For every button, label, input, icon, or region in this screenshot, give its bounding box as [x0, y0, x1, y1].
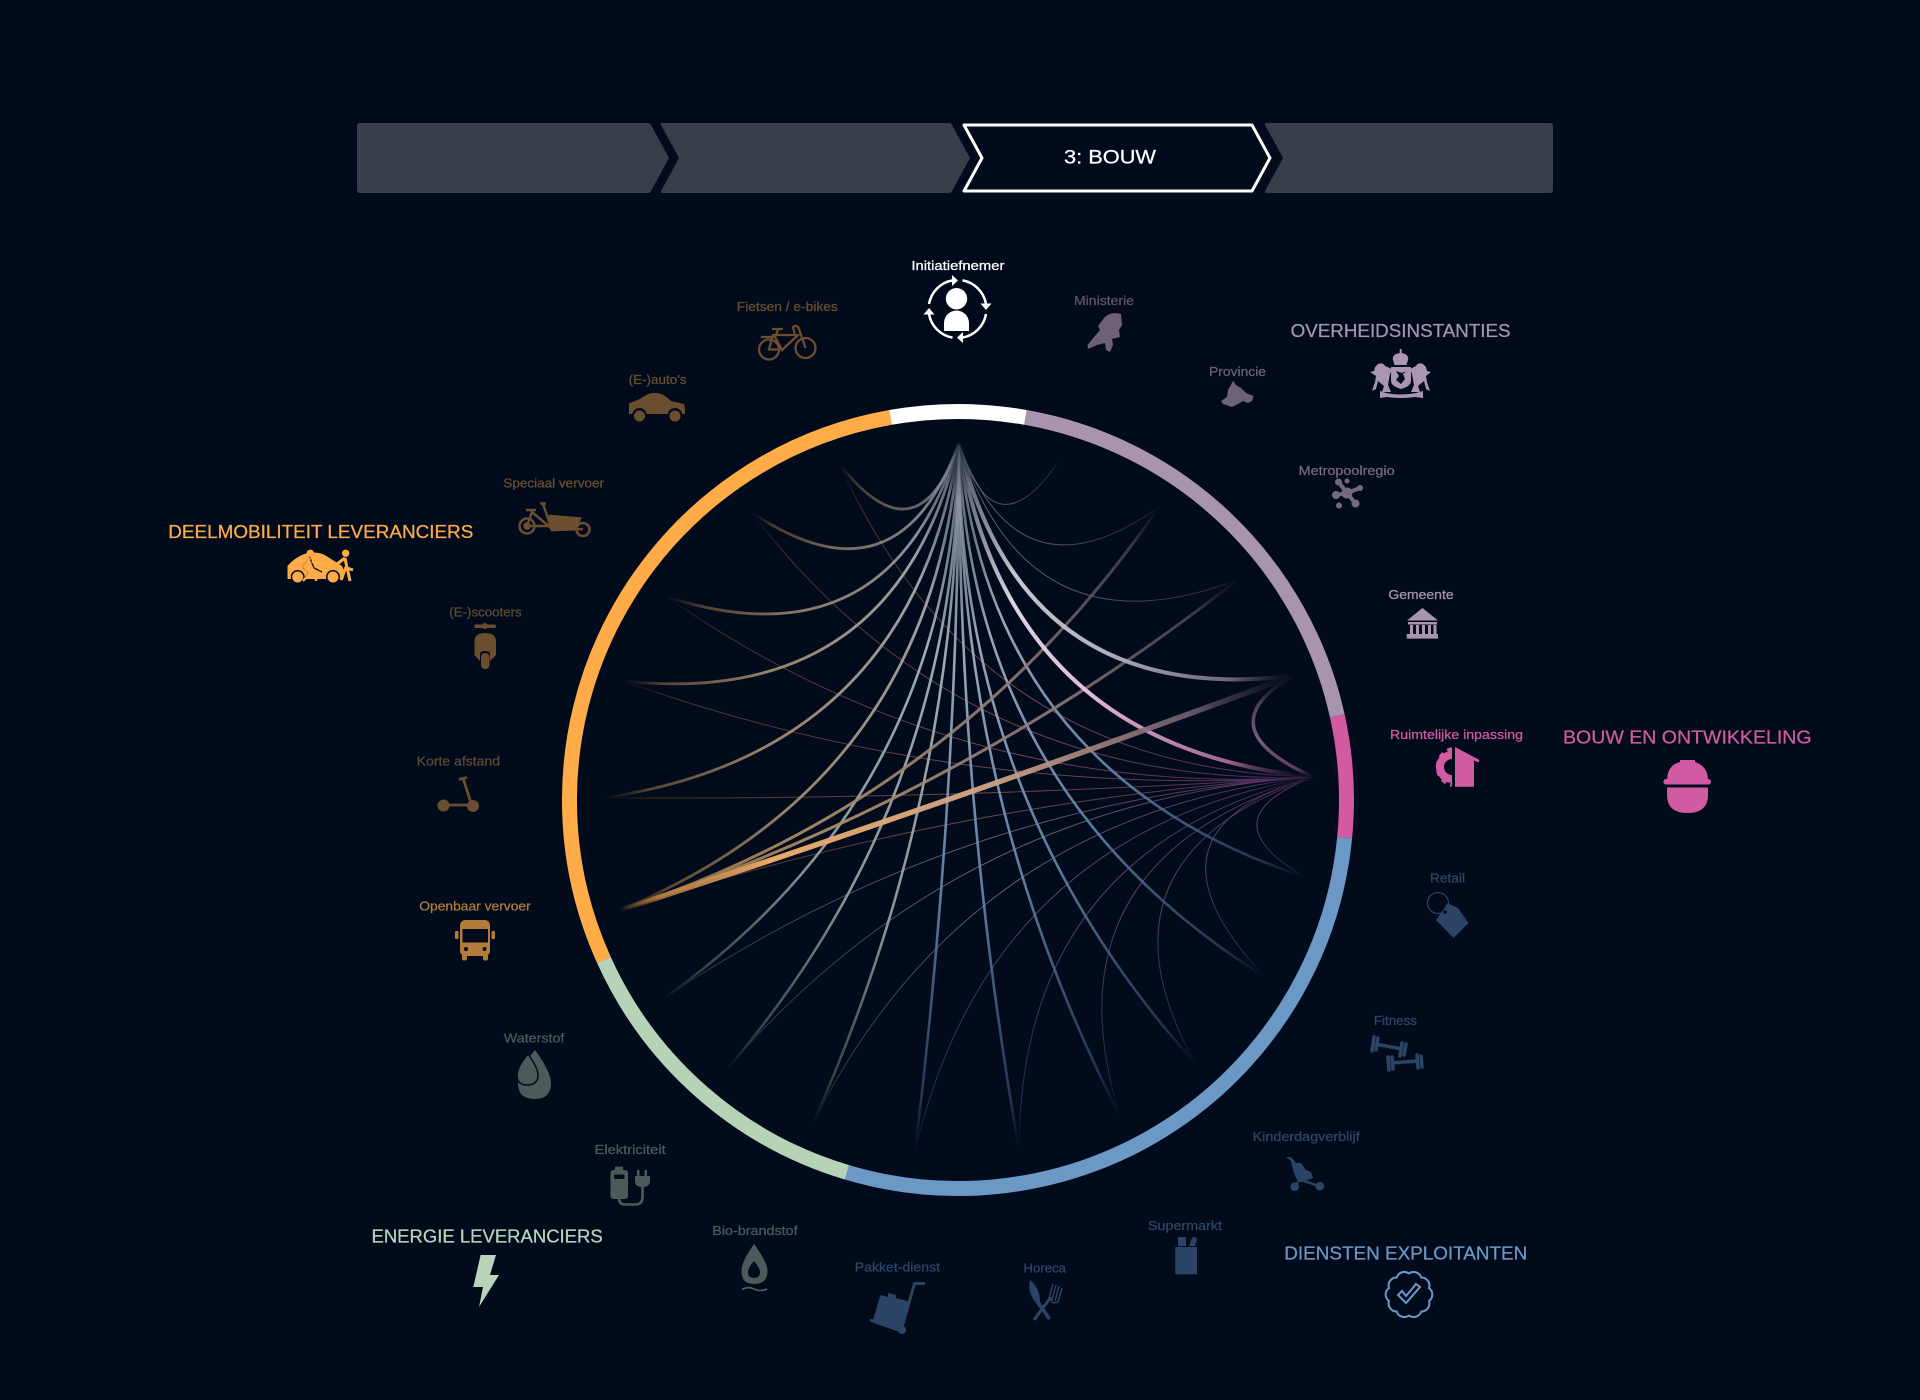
icon: water drops: [517, 1050, 551, 1099]
icon: person with cycle arrows: [924, 275, 992, 343]
icon: town hall: [1407, 608, 1438, 639]
label: Provincie: [1209, 364, 1266, 379]
chord: gemeente to ruimtelijke inpassing: [1253, 676, 1313, 777]
label: Initiatiefnemer: [911, 258, 1005, 273]
label: Kinderdagverblijf: [1253, 1129, 1360, 1144]
node: Initiatiefnemer: [911, 258, 1005, 343]
icon: dumbbells: [1372, 1037, 1422, 1070]
node: Kinderdagverblijf: [1253, 1129, 1360, 1191]
heading: BOUW EN ONTWIKKELING: [1563, 728, 1812, 748]
outer ring: [569, 411, 1346, 1188]
node: Openbaar vervoer: [419, 898, 531, 960]
icon: stroller: [1286, 1157, 1324, 1191]
banner: [1380, 391, 1423, 398]
heading: OVERHEIDSINSTANTIES: [1291, 321, 1511, 341]
node: Speciaal vervoer: [503, 476, 605, 536]
icon: bus: [455, 920, 495, 960]
label: (E-)scooters: [449, 604, 522, 619]
ring segment: initiatiefnemer: [890, 411, 1026, 417]
node: Fitness: [1372, 1013, 1422, 1070]
node: Supermarkt: [1148, 1218, 1222, 1274]
right lion: [1410, 363, 1431, 392]
icon: kick scooter: [438, 778, 479, 812]
node: Korte afstand: [417, 754, 500, 812]
category: BOUW EN ONTWIKKELING: [1563, 728, 1812, 813]
phase 3 active chevron: 3: BOUW: [1064, 148, 1156, 168]
chord: gemeente to initiatiefnemer: [959, 443, 1292, 679]
icon: province shape: [1221, 381, 1254, 407]
label: Fitness: [1374, 1013, 1418, 1028]
label: Ministerie: [1074, 293, 1134, 308]
label: (E-)auto's: [629, 372, 687, 387]
chords: ruimtelijke inpassing thin links: [603, 465, 1313, 1152]
heading: DIENSTEN EXPLOITANTEN: [1284, 1243, 1527, 1263]
icon: hard hat: [1663, 760, 1711, 813]
icon: gear and house: [1436, 747, 1480, 787]
chords: initiatiefnemer to energie: [663, 443, 959, 1123]
phase 1 chevron: [357, 123, 669, 193]
node: Ministerie: [1074, 293, 1134, 352]
category: DIENSTEN EXPLOITANTEN: [1284, 1243, 1527, 1317]
chords: initiatiefnemer to diensten: [915, 443, 1305, 1152]
left lion: [1370, 363, 1392, 392]
shield: [1391, 367, 1411, 389]
label: Elektriciteit: [594, 1142, 666, 1157]
label: Bio-brandstof: [712, 1223, 798, 1238]
ring segment: diensten: [847, 838, 1345, 1188]
node: Fietsen / e-bikes: [737, 299, 838, 360]
node: Gemeente: [1388, 587, 1454, 639]
node: Bio-brandstof: [712, 1223, 798, 1290]
icon: coat of arms: [1370, 349, 1431, 398]
label: Openbaar vervoer: [419, 898, 531, 914]
icon: groceries: [1175, 1237, 1197, 1274]
icon: car: [629, 393, 685, 423]
node: (E-)auto's: [629, 372, 687, 423]
icon: parcel trolley: [870, 1284, 925, 1334]
chord: ruimtelijke inpassing to initiatiefnemer: [959, 443, 1313, 777]
label: Korte afstand: [417, 754, 500, 768]
node: Provincie: [1209, 364, 1266, 407]
ring segment: deelmobiliteit: [569, 417, 890, 960]
chords: initiatiefnemer to overheid thin: [959, 443, 1237, 601]
node: Ruimtelijke inpassing: [1390, 727, 1523, 787]
ring segment: energie: [604, 960, 847, 1172]
node: Waterstof: [504, 1031, 565, 1099]
icon: bicycle: [759, 326, 816, 360]
icon: shared car and people: [288, 550, 353, 584]
label: Ruimtelijke inpassing: [1390, 727, 1523, 742]
label: Waterstof: [504, 1031, 565, 1046]
icon: connected blobs: [1332, 478, 1363, 508]
icon: map of the Netherlands: [1088, 313, 1122, 352]
node: Retail: [1428, 871, 1468, 938]
ring segment: bouw en ontwikkeling: [1337, 716, 1346, 838]
crown: [1393, 349, 1408, 365]
icon: scooter: [474, 623, 496, 669]
chord diagram: [603, 443, 1313, 1152]
icon: flame: [741, 1244, 768, 1290]
label: Gemeente: [1388, 587, 1454, 602]
label: Retail: [1430, 871, 1465, 886]
label: Metropoolregio: [1299, 463, 1395, 478]
heading: DEELMOBILITEIT LEVERANCIERS: [168, 522, 473, 542]
phase 2 chevron: [661, 123, 970, 193]
node: Metropoolregio: [1299, 463, 1395, 508]
heading: ENERGIE LEVERANCIERS: [372, 1227, 603, 1247]
chords: initiatiefnemer to deelmobiliteit: [603, 443, 959, 910]
label: Pakket-dienst: [855, 1260, 940, 1275]
node: Elektriciteit: [594, 1142, 666, 1204]
label: Horeca: [1024, 1261, 1067, 1276]
icon: cargo bike: [520, 504, 590, 536]
chords: openbaar vervoer to overheid: [620, 507, 1237, 910]
node: Pakket-dienst: [855, 1260, 940, 1334]
phase 4 chevron: [1265, 123, 1553, 193]
node: (E-)scooters: [449, 604, 522, 669]
icon: knife and fork: [1029, 1280, 1062, 1320]
icon: lightning bolt: [473, 1255, 499, 1307]
label: Supermarkt: [1148, 1218, 1222, 1233]
category: OVERHEIDSINSTANTIES: [1291, 321, 1511, 398]
label: Speciaal vervoer: [503, 476, 605, 491]
icon: price tag: [1428, 892, 1468, 938]
phase bar: [357, 123, 1553, 193]
phase 3 active chevron: [964, 125, 1270, 191]
category: DEELMOBILITEIT LEVERANCIERS: [168, 522, 473, 584]
label: Fietsen / e-bikes: [737, 299, 838, 314]
ring segment: overheidsinstanties: [1026, 417, 1337, 716]
category: ENERGIE LEVERANCIERS: [372, 1227, 603, 1307]
icon: battery and plug: [610, 1167, 650, 1204]
node: Horeca: [1024, 1261, 1067, 1320]
icon: quality badge: [1386, 1272, 1432, 1317]
chord: openbaar vervoer to gemeente: [620, 676, 1292, 910]
